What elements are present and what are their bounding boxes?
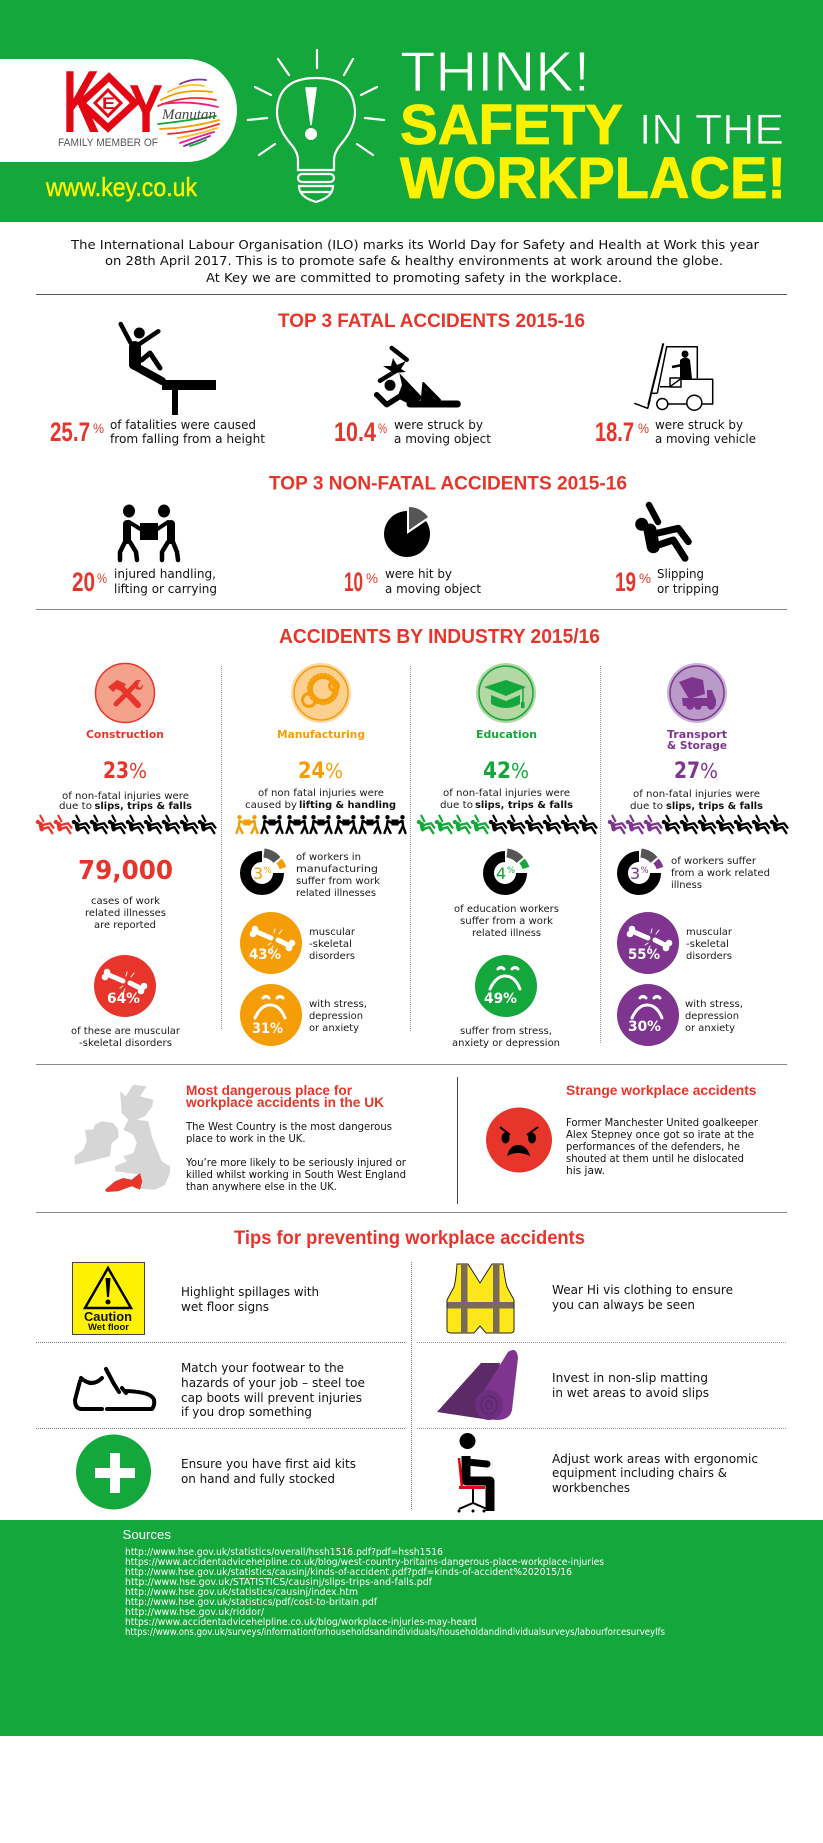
source links: http://www.hse.gov.uk/STATISTICS/causinj/slips-trips-and-falls.pdf [125, 1577, 433, 1588]
stat: 27% [674, 759, 718, 784]
stat: 10%: were hit by [385, 567, 452, 581]
stat: 20%: % [97, 570, 107, 586]
description [454, 904, 559, 939]
stat: 20%: lifting or carrying [114, 582, 217, 596]
description [309, 999, 367, 1034]
icon: ergonomic chair [458, 1433, 490, 1512]
icon: non-slip mat [437, 1350, 518, 1420]
donut: 3%: % [264, 866, 272, 876]
description: of workers suffer [671, 856, 757, 867]
description: muscular [309, 927, 356, 938]
description: -skeletal [686, 939, 729, 950]
stat: 24%: 24 [298, 759, 325, 784]
source links: https://www.accidentadvicehelpline.co.uk/blog/workplace-injuries-may-heard [125, 1617, 477, 1628]
stat: 19%: 19 [615, 567, 636, 597]
icon: hammer and wrench badge [96, 664, 154, 722]
body text [566, 1117, 759, 1177]
tip: footwear: Match your footwear to the [181, 1361, 344, 1375]
title: SAFETY [400, 93, 623, 157]
stat: 27%: % [700, 759, 718, 783]
description: of non-fatal injuries were [633, 789, 760, 800]
stat: 23%: 23 [103, 759, 129, 784]
icon: cement truck badge [667, 663, 727, 723]
label: Manufacturing [277, 728, 365, 741]
stat: 10.4% [334, 417, 491, 447]
description: of non-fatal injuries were [443, 788, 570, 799]
tip: hi vis [552, 1283, 733, 1312]
tip: ergonomic equipment: workbenches [552, 1481, 630, 1495]
description: -skeletal disorders [79, 1038, 172, 1049]
tip: spillages [181, 1285, 319, 1314]
label: Transport [667, 728, 727, 741]
description: depression [685, 1011, 739, 1022]
stat circle: 64% [94, 955, 156, 1017]
panel: transport and storage [608, 663, 787, 1046]
icon: forklift [634, 343, 713, 410]
stat: 25.7%: from falling from a height [110, 432, 265, 446]
icon: safety shoe [75, 1369, 154, 1409]
label [667, 728, 727, 752]
description: lifting & handling [299, 800, 396, 811]
stat circle: 30%: 30% [628, 1019, 661, 1035]
stat: 10.4%: 10.4 [334, 417, 376, 447]
description: related illnesses [296, 888, 376, 899]
stat circle: 43%: 43% [249, 947, 281, 963]
source links: http://www.hse.gov.uk/statistics/causinj/kinds-of-accident.pdf?pdf=kinds-of-accident%202015/16 [125, 1567, 572, 1578]
description: related illnesses [85, 908, 166, 919]
icon: UK map [74, 1085, 170, 1192]
heading: TOP 3 NON-FATAL ACCIDENTS 2015-16 [269, 472, 627, 494]
icon: slipping [635, 505, 688, 558]
stat: 10.4%: a moving object [394, 432, 491, 446]
Manutan swirl logo: Manutan [161, 107, 216, 123]
description: with stress, [309, 999, 367, 1010]
description: are reported [94, 920, 156, 931]
body text: shouted at them until he dislocated [566, 1153, 744, 1165]
icon: first aid [76, 1434, 151, 1510]
description: due to [59, 801, 92, 812]
description [671, 856, 770, 891]
source links: http://www.hse.gov.uk/statistics/causinj/index.htm [125, 1587, 358, 1598]
description: disorders [309, 951, 355, 962]
description [309, 927, 356, 962]
pictogram row [36, 816, 215, 833]
tip: footwear: if you drop something [181, 1405, 312, 1419]
heading [185, 1082, 384, 1110]
stat: 18.7%: 18.7 [595, 417, 634, 447]
description: -skeletal [309, 939, 352, 950]
description [452, 1026, 560, 1049]
icon: pie chart 10 percent [384, 507, 430, 557]
donut: 4%: % [507, 866, 515, 876]
stat: 10.4%: were struck by [394, 418, 483, 432]
description: caused by [245, 800, 297, 811]
stat: 42%: % [511, 759, 529, 783]
tip: footwear: cap boots will prevent injuries [181, 1391, 362, 1405]
icon: light bulb [248, 50, 384, 202]
stat: 25.7%: % [93, 420, 104, 436]
stat: 25.7%: 25.7 [50, 417, 90, 447]
description: manufacturing [296, 864, 378, 875]
stat: 10%: % [366, 570, 378, 586]
description: illness [671, 880, 702, 891]
source links [125, 1547, 665, 1638]
title [400, 40, 786, 211]
stat: 18.7%: a moving vehicle [655, 432, 756, 446]
icon: hi vis vest [447, 1264, 514, 1333]
stat circle: 43% [240, 912, 302, 974]
description: suffer from a work [460, 916, 553, 927]
stat: 79,000: 79,000 [78, 856, 173, 886]
body text [185, 1121, 407, 1193]
donut: 4%: 4 [496, 864, 506, 883]
description: muscular [686, 927, 733, 938]
description: with stress, [685, 999, 743, 1010]
source links: https://www.accidentadvicehelpline.co.uk/blog/west-country-britains-dangerous-place-workplace-injuries [125, 1557, 604, 1568]
description: depression [309, 1011, 363, 1022]
description [630, 789, 763, 812]
sources heading: Sources [122, 1527, 171, 1542]
icon: wet floor sign: Wet floor [88, 1322, 130, 1332]
stat: 10.4%: % [378, 420, 387, 436]
description: suffer from stress, [460, 1026, 552, 1037]
family member caption: FAMILY MEMBER OF [58, 137, 158, 149]
donut: 3%: % [640, 866, 649, 876]
panel: strange workplace accidents [486, 1082, 759, 1177]
label: Education [476, 728, 537, 741]
body text: Alex Stepney once got so irate at the [566, 1129, 754, 1141]
donut: 3%: 3 [253, 864, 263, 883]
stat: 19%: % [639, 570, 651, 586]
intro text [70, 237, 760, 285]
source links: http://www.hse.gov.uk/riddor/ [125, 1607, 265, 1618]
body text: place to work in the UK. [186, 1133, 306, 1145]
title: THINK! [400, 40, 590, 104]
Key logo: E [102, 94, 115, 113]
stat: 24%: % [325, 759, 343, 783]
intro text: The International Labour Organisation (ILO) marks its World Day for Safety and Health at Work this year [70, 237, 760, 252]
heading: TOP 3 FATAL ACCIDENTS 2015-16 [278, 310, 585, 332]
description: suffer from work [296, 876, 380, 887]
website address: www.key.co.uk [45, 172, 198, 202]
description [686, 927, 733, 962]
stat: 19% [615, 567, 719, 597]
icon: wet floor sign [72, 1262, 144, 1334]
description: of these are muscular [71, 1026, 181, 1037]
panel: most dangerous place [74, 1082, 407, 1193]
stat: 18.7%: % [638, 420, 649, 436]
description [685, 999, 743, 1034]
Key logo: Y [129, 71, 163, 147]
heading: Tips for preventing workplace accidents [234, 1227, 585, 1249]
Key logo [63, 52, 163, 151]
heading: accidents by industry: ACCIDENTS BY INDUSTRY 2015/16 [279, 626, 600, 648]
tip: matting [552, 1371, 709, 1400]
description [85, 896, 166, 931]
description: of workers in [296, 852, 361, 863]
stat circle: 55%: 55% [628, 947, 660, 963]
stat: 27%: 27 [674, 759, 700, 784]
intro text: At Key we are committed to promoting safety in the workplace. [206, 270, 622, 285]
description [71, 1026, 181, 1049]
donut: 3%: 3 [630, 864, 640, 883]
description: related illness [472, 928, 541, 939]
label: & Storage [667, 739, 727, 752]
panel: top 3 fatal accidents [50, 310, 756, 447]
donut: 3% [246, 853, 283, 890]
icon: angry face [486, 1108, 552, 1172]
icon: lifting and carrying [120, 504, 178, 560]
label: Construction [86, 728, 164, 741]
description: cases of work [91, 896, 160, 907]
title: IN THE [639, 106, 784, 154]
tip: matting: Invest in non-slip matting [552, 1371, 708, 1385]
tip: first aid kits: Ensure you have first aid kits [181, 1457, 356, 1471]
stat: 18.7% [595, 417, 756, 447]
description: or anxiety [309, 1023, 359, 1034]
description: slips, trips & falls [475, 800, 573, 811]
stat: 10%: 10 [344, 567, 363, 597]
footer: sources [0, 1520, 823, 1736]
tip: ergonomic equipment: Adjust work areas with ergonomic [552, 1452, 758, 1466]
description: of education workers [454, 904, 559, 915]
tip: first aid kits: on hand and fully stocked [181, 1472, 335, 1486]
stat: 20%: injured handling, [114, 567, 216, 581]
panel: construction [36, 664, 215, 1049]
donut: 3% [622, 853, 660, 890]
heading: Strange workplace accidents [566, 1082, 757, 1098]
stat: 10%: a moving object [385, 582, 481, 596]
pictogram row [417, 816, 596, 833]
stat: 42%: 42 [483, 759, 511, 784]
logo pill [0, 52, 237, 162]
title: WORKPLACE! [400, 146, 786, 211]
stat: 19%: or tripping [657, 582, 719, 596]
description [440, 788, 573, 811]
panel: manufacturing [236, 663, 406, 1046]
stat circle: 49%: 49% [484, 991, 517, 1007]
intro text: on 28th April 2017. This is to promote safe & healthy environments at work around the globe. [105, 253, 723, 268]
body text: The West Country is the most dangerous [185, 1121, 392, 1133]
stat: 23%: % [129, 759, 147, 783]
icon: falling from height [121, 324, 216, 415]
stat circle: 31% [240, 984, 302, 1046]
source links: https://www.ons.gov.uk/surveys/informationforhouseholdsandindividuals/householdandindividualsurveys/labourforcesurveylfs [125, 1627, 665, 1638]
body text: performances of the defenders, he [566, 1141, 740, 1153]
stat: 20% [72, 567, 217, 597]
stat circle: 49% [475, 955, 537, 1017]
description: due to [440, 800, 473, 811]
panel: top 3 non-fatal accidents [72, 472, 719, 597]
stat: 10% [344, 567, 481, 597]
description [296, 852, 380, 899]
tip: footwear: hazards of your job – steel toe [181, 1376, 365, 1390]
icon: gears badge [291, 663, 351, 723]
stat circle: 64%: 64% [107, 991, 140, 1007]
description: slips, trips & falls [94, 801, 192, 812]
heading: Most dangerous place for [186, 1082, 353, 1098]
tip: footwear [181, 1361, 365, 1419]
body text: his jaw. [566, 1165, 605, 1177]
body text: killed whilst working in South West England [186, 1169, 406, 1181]
source links: http://www.hse.gov.uk/statistics/overall/hssh1516.pdf?pdf=hssh1516 [125, 1547, 443, 1558]
stat circle: 55% [617, 912, 679, 974]
stat: 25.7%: of fatalities were caused [110, 418, 256, 432]
icon: graduation cap badge [476, 663, 536, 723]
Manutan swirl logo [158, 80, 219, 146]
stat circle: 31%: 31% [252, 1021, 283, 1037]
description: due to [630, 801, 663, 812]
description: of non-fatal injuries were [62, 791, 189, 802]
tip: ergonomic equipment: equipment including chairs & [552, 1466, 727, 1480]
description: from a work related [671, 868, 770, 879]
stat: 20%: 20 [72, 567, 95, 597]
stat: 42% [483, 759, 529, 784]
description: anxiety or depression [452, 1038, 560, 1049]
description: or anxiety [685, 1023, 735, 1034]
body text: than anywhere else in the UK. [186, 1181, 337, 1193]
panel: tips for preventing accidents [36, 1227, 787, 1512]
tip: hi vis: Wear Hi vis clothing to ensure [552, 1283, 733, 1297]
stat: 25.7% [50, 417, 265, 447]
description [245, 788, 396, 811]
stat circle: 30% [617, 984, 679, 1046]
stat: 18.7%: were struck by [655, 418, 743, 432]
tip: hi vis: you can always be seen [552, 1298, 695, 1312]
Key logo: K [63, 52, 99, 151]
panel: education [417, 663, 596, 1049]
stat: 23% [103, 759, 147, 784]
tip: first aid kits [181, 1457, 356, 1486]
pictogram row [608, 816, 787, 833]
donut: 4% [488, 853, 526, 890]
tip: ergonomic equipment [552, 1452, 758, 1495]
description: of non fatal injuries were [258, 788, 384, 799]
description [59, 791, 192, 812]
pictogram row [236, 815, 406, 833]
body text: You’re more likely to be seriously injured or [185, 1157, 407, 1169]
description: slips, trips & falls [666, 801, 763, 812]
description: disorders [686, 951, 732, 962]
body text: Former Manchester United goalkeeper [566, 1117, 759, 1129]
source links: http://www.hse.gov.uk/statistics/pdf/cost-to-britain.pdf [125, 1597, 378, 1608]
tip: matting: in wet areas to avoid slips [552, 1386, 709, 1400]
icon: wet floor sign: Caution [84, 1309, 132, 1324]
heading: workplace accidents in the UK [185, 1094, 384, 1110]
header banner [0, 0, 823, 222]
stat: 24% [298, 759, 343, 784]
tip: spillages: wet floor signs [181, 1300, 269, 1314]
stat: 19%: Slipping [657, 567, 704, 581]
icon: struck by object [377, 348, 457, 405]
tip: spillages: Highlight spillages with [181, 1285, 319, 1299]
